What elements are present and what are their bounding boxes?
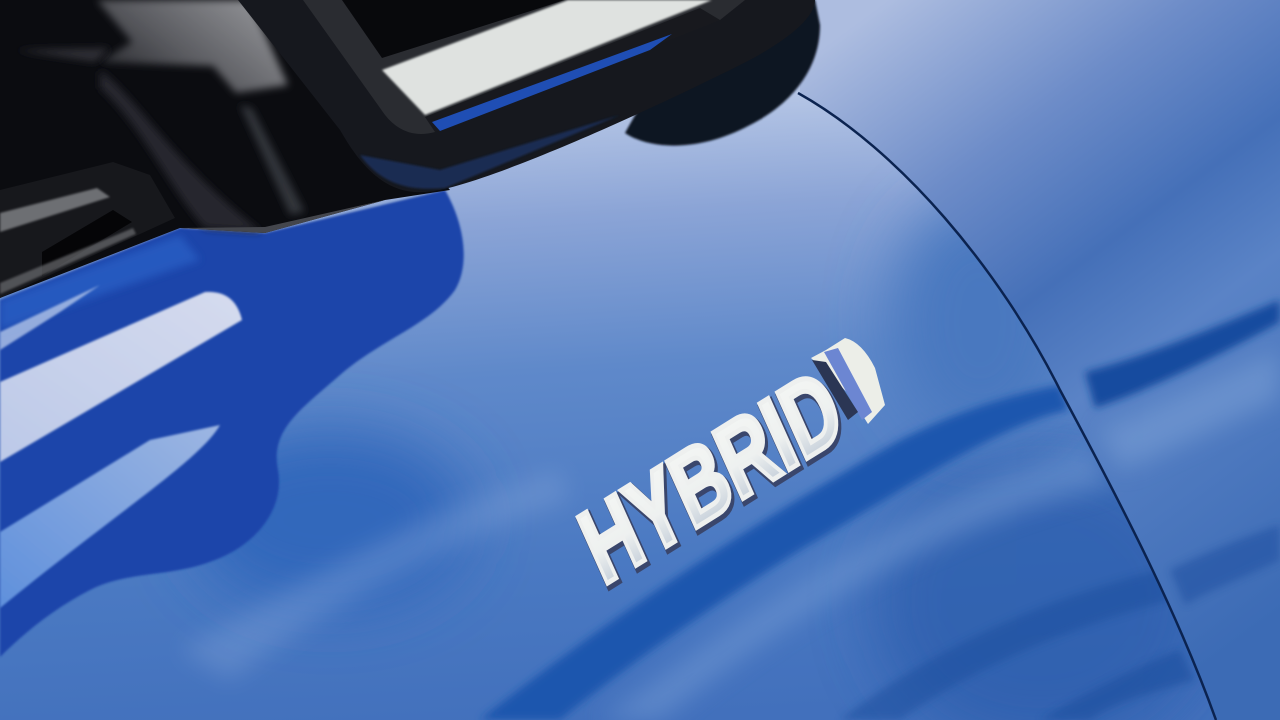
reflection highlight: thin upper (0, 285, 100, 350)
handle trim (0, 162, 175, 298)
dark glass (342, 0, 565, 58)
badge text shadow: HYBRID (566, 350, 860, 610)
diagonal trim faces (100, 70, 262, 232)
chrome strip (382, 0, 712, 115)
grey plastic highlight (97, 0, 288, 93)
hybrid badge (564, 338, 885, 610)
reflection highlight: lower (0, 425, 220, 608)
mirror inner frame (303, 0, 745, 134)
reflection highlight: large (0, 292, 242, 462)
badge text: HYBRID (564, 347, 858, 607)
black trim and mirror base (0, 0, 450, 298)
side mirror (238, 0, 820, 192)
mirror reflection in paint (0, 190, 464, 657)
blue sliver shadow (425, 8, 720, 132)
badge swoosh (811, 338, 885, 424)
panel gap line (798, 93, 1216, 720)
mirror shadow lobe (625, 0, 820, 146)
mirror housing (238, 0, 815, 192)
blue sliver (432, 34, 672, 131)
right body panel (800, 0, 1280, 602)
